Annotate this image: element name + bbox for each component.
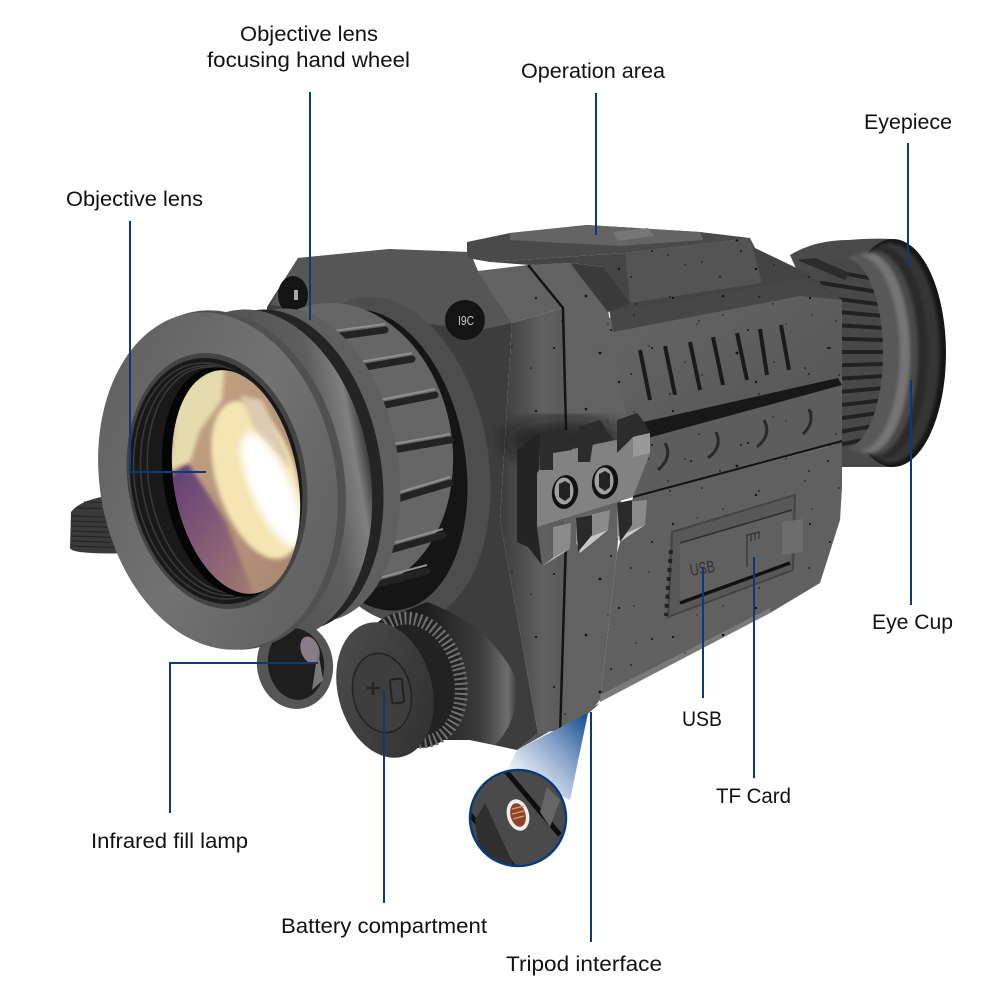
objective lens	[98, 310, 346, 650]
rail indents	[658, 409, 811, 470]
label: objective lens focusing hand wheel: Objective lens	[240, 23, 378, 46]
front ring face	[72, 293, 364, 669]
lens glass	[172, 370, 300, 594]
TF card mark	[747, 532, 760, 567]
body seam	[528, 265, 566, 735]
callout line: TF card	[753, 557, 755, 778]
callout line: eyepiece	[907, 143, 909, 266]
underside of the body	[517, 703, 600, 750]
label: objective lens focusing hand wheel	[207, 23, 410, 72]
USB mark: USB	[688, 557, 716, 580]
label: objective lens focusing hand wheel: focusing hand wheel	[207, 49, 410, 72]
plus and battery icon	[367, 678, 404, 704]
label: battery compartment: Battery compartment	[281, 915, 487, 938]
mount screws	[549, 463, 621, 511]
barrel recess	[261, 280, 515, 640]
wrist strap	[70, 494, 135, 553]
callout line: focusing wheel	[309, 92, 311, 320]
infrared fill lamp	[251, 616, 339, 714]
label: infrared fill lamp: Infrared fill lamp	[91, 830, 248, 853]
speckle texture	[499, 240, 840, 715]
knurled ring	[344, 600, 480, 760]
body front block	[267, 249, 538, 750]
upper teeth	[540, 413, 650, 470]
lower teeth	[542, 500, 647, 566]
USB and TF card door	[666, 495, 803, 617]
copper insert	[506, 799, 530, 831]
callout line: eye cup	[910, 380, 912, 605]
label: objective lens: Objective lens	[66, 188, 203, 211]
eyepiece with eye cup	[790, 239, 946, 467]
label: operation area: Operation area	[521, 60, 665, 83]
operation area top plate	[467, 225, 762, 312]
label: tripod interface: Tripod interface	[506, 953, 662, 976]
callout line: USB	[702, 567, 704, 698]
label: eye cup: Eye Cup	[872, 611, 953, 634]
callout line: infrared lamp	[170, 663, 318, 813]
mount shadow	[505, 418, 625, 462]
focusing hand wheel	[205, 285, 475, 609]
rail face	[630, 378, 842, 497]
beam to tripod detail	[507, 713, 588, 800]
vent slots	[640, 325, 789, 400]
label: USB: USB	[682, 708, 722, 731]
front face of the block	[500, 308, 566, 733]
corner screws	[278, 276, 485, 340]
barrel and focusing wheel	[127, 280, 515, 658]
top rear ledge	[603, 238, 842, 335]
picatinny mount	[517, 413, 650, 566]
rear side panel lower	[600, 443, 842, 700]
label: eyepiece: Eyepiece	[864, 111, 952, 134]
main body shell	[267, 238, 842, 750]
callout line: operation area	[595, 93, 597, 235]
grip notches	[666, 550, 671, 616]
rail groove	[630, 378, 842, 442]
label: TF card: TF Card	[716, 785, 791, 808]
tripod interface detail	[468, 770, 566, 868]
front ring side	[76, 291, 372, 669]
battery cap	[322, 611, 448, 769]
corner screws: I9C	[458, 313, 474, 328]
rear side panel upper	[608, 282, 842, 445]
ribbed eyepiece neck	[820, 272, 883, 446]
wheel ribs	[333, 330, 450, 585]
door tab	[782, 519, 803, 555]
callout line: objective lens	[130, 221, 206, 472]
inner threads	[111, 344, 321, 618]
callout line: battery	[383, 690, 385, 903]
battery compartment housing	[322, 600, 517, 769]
callout line: tripod	[590, 712, 592, 942]
centre band	[528, 263, 627, 735]
rail lower edge	[633, 441, 842, 497]
